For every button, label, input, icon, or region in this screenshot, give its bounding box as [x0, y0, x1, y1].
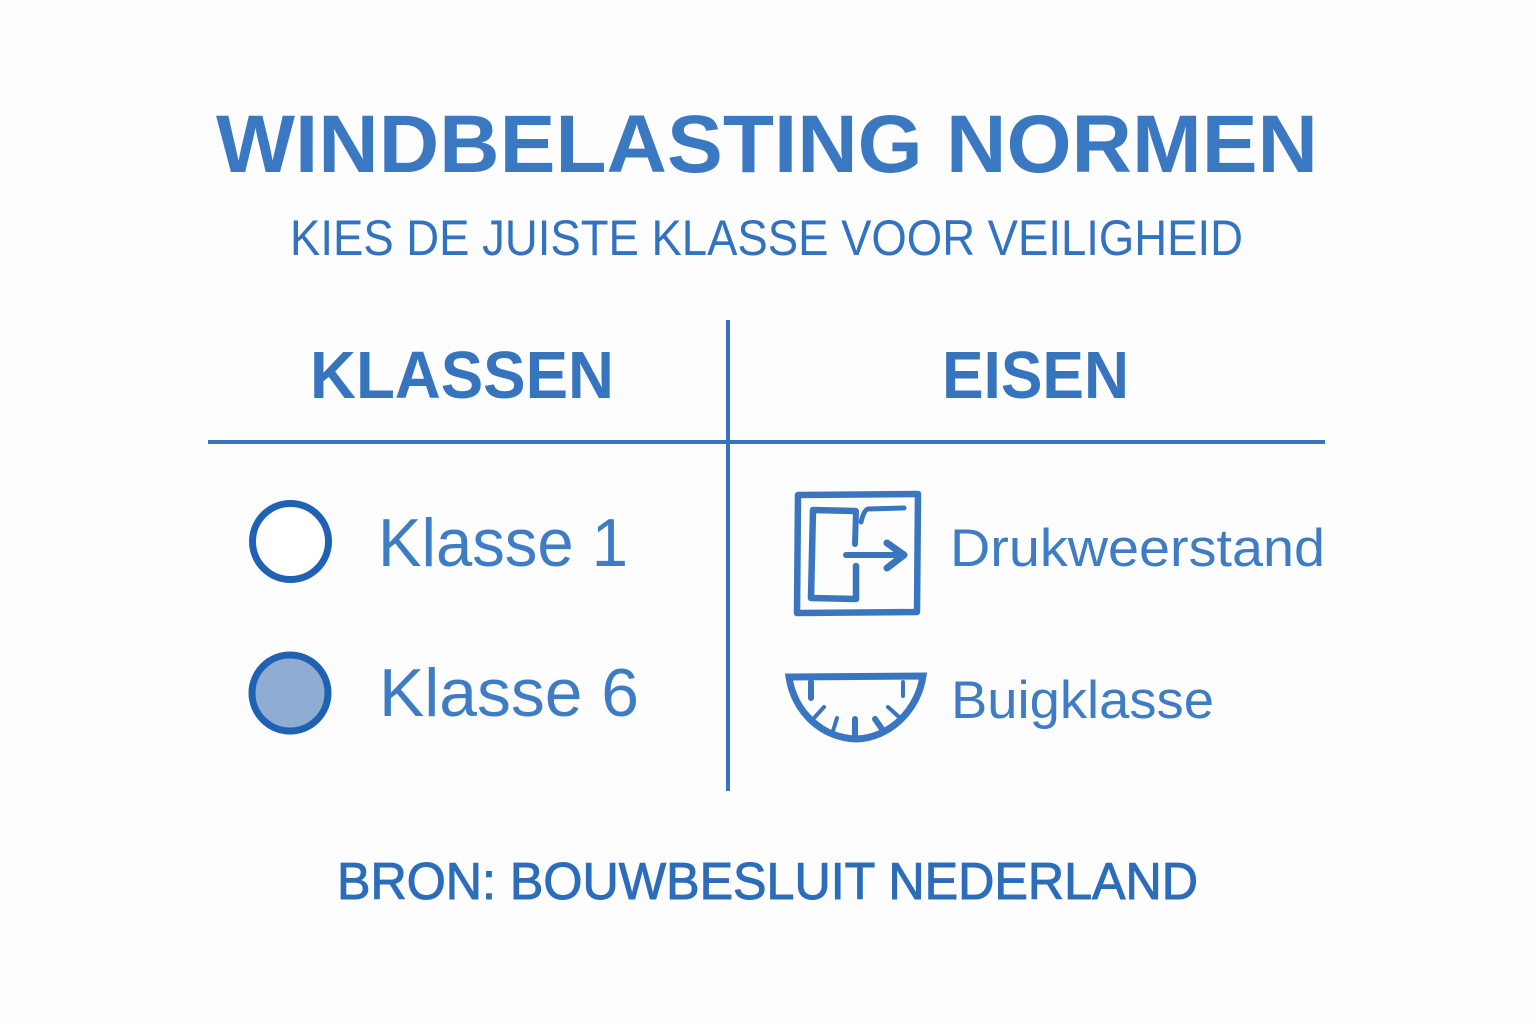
heading: klassen: KLASSEN [310, 338, 614, 413]
subtitle: KIES DE JUISTE KLASSE VOOR VEILIGHEID [290, 210, 1243, 266]
icon: pressure resistance floor plan with arrow [797, 494, 918, 613]
table grid [208, 320, 1325, 791]
icon: empty circle class 1 [252, 504, 328, 580]
icon: filled circle class 6 [252, 655, 328, 731]
icon: bending class protractor [789, 676, 923, 739]
title: WINDBELASTING NORMEN [216, 99, 1318, 190]
label: klasse 6: Klasse 6 [379, 655, 639, 731]
source line: BRON: BOUWBESLUIT NEDERLAND [337, 853, 1198, 911]
label: drukweerstand: Drukweerstand [950, 519, 1325, 578]
heading: eisen: EISEN [942, 338, 1129, 413]
label: klasse 1: Klasse 1 [378, 505, 628, 581]
label: buigklasse: Buigklasse [951, 671, 1214, 730]
